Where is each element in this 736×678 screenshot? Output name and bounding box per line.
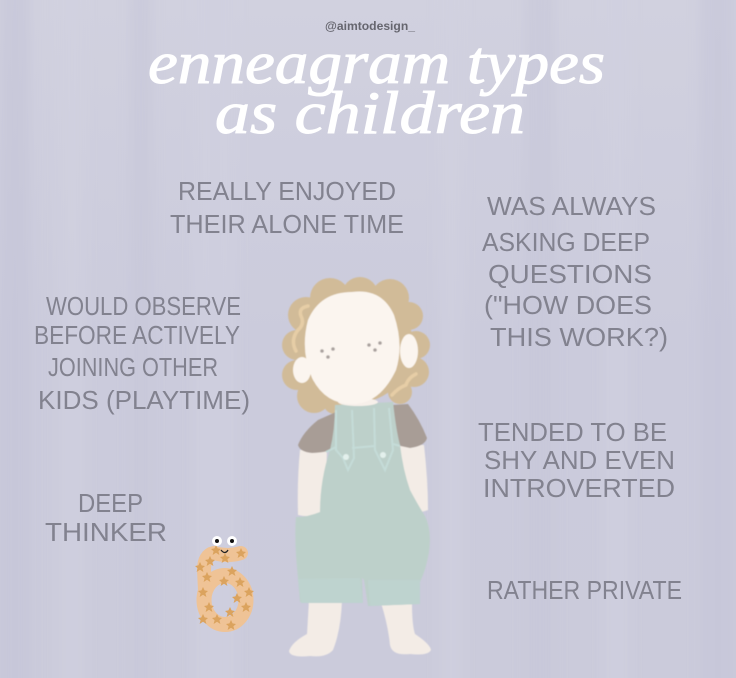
star spots xyxy=(195,545,254,630)
buttons xyxy=(343,454,349,460)
text: asking deep questions: ("HOW DOES xyxy=(484,290,652,320)
text: shy and introverted: TENDED TO BE xyxy=(478,417,667,447)
title xyxy=(148,30,605,146)
text: really enjoyed alone time: REALLY ENJOYED xyxy=(178,176,396,206)
text: asking deep questions: QUESTIONS xyxy=(488,259,652,289)
smile xyxy=(221,550,228,552)
text: asking deep questions xyxy=(482,191,668,352)
text: deep thinker: THINKER xyxy=(45,517,167,547)
neck xyxy=(338,398,378,406)
text: observe before joining: WOULD OBSERVE xyxy=(46,291,241,321)
text: shy and introverted xyxy=(478,417,675,503)
text: asking deep questions: ASKING DEEP xyxy=(482,227,650,257)
text: shy and introverted: INTROVERTED xyxy=(483,473,675,503)
number five character xyxy=(195,536,254,630)
ears xyxy=(293,357,311,383)
sleeves xyxy=(298,412,336,453)
text: shy and introverted: SHY AND EVEN xyxy=(484,445,675,475)
eyes xyxy=(212,536,237,546)
hair highlights xyxy=(293,306,416,395)
freckles xyxy=(320,341,382,359)
credit handle: @aimtodesign_ xyxy=(325,19,415,33)
hair xyxy=(282,277,430,414)
text: asking deep questions: THIS WORK?) xyxy=(490,322,668,352)
title: as children xyxy=(215,80,525,146)
text: observe before joining: BEFORE ACTIVELY xyxy=(34,320,240,350)
text: asking deep questions: WAS ALWAYS xyxy=(487,191,656,221)
text: really enjoyed alone time: THEIR ALONE TIME xyxy=(170,209,404,239)
arms xyxy=(298,450,327,516)
title: enneagram types xyxy=(148,30,605,96)
text: observe before joining: JOINING OTHER xyxy=(48,352,218,382)
text: rather private: RATHER PRIVATE xyxy=(487,575,682,605)
text: really enjoyed alone time xyxy=(170,176,404,239)
text: observe before joining xyxy=(34,291,250,415)
face xyxy=(305,291,400,404)
text: deep thinker: DEEP xyxy=(78,488,143,518)
overalls xyxy=(295,402,430,606)
legs xyxy=(289,600,342,656)
bib straps xyxy=(326,408,400,470)
child figure xyxy=(282,277,431,656)
text: deep thinker xyxy=(45,488,167,547)
text: observe before joining: KIDS (PLAYTIME) xyxy=(38,385,250,415)
